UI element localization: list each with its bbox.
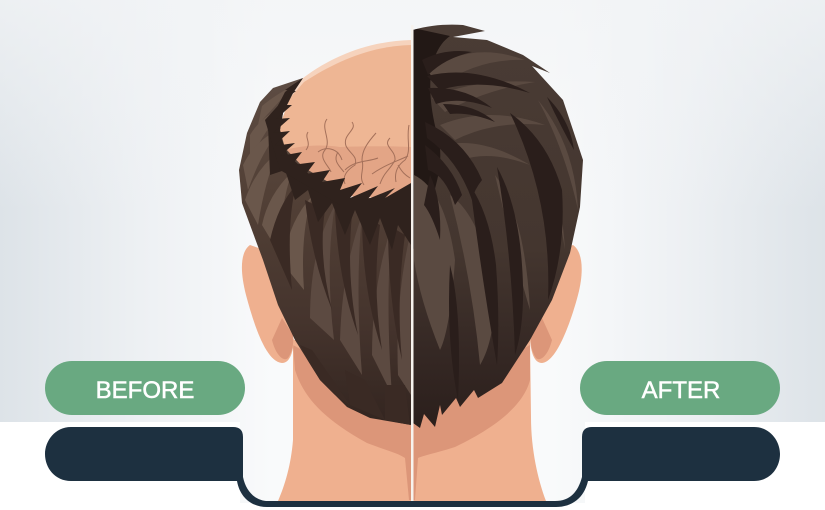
light strands upper left [243, 84, 312, 290]
right side: full hair [413, 20, 588, 435]
dark strands [270, 185, 410, 425]
after label [580, 361, 780, 415]
dark strands [422, 51, 574, 400]
left ear [242, 245, 294, 363]
mid strands [310, 205, 411, 395]
centre divider [411, 25, 414, 502]
right ear [530, 245, 582, 363]
hairline spikes [265, 78, 411, 205]
dark mass at parting [413, 28, 450, 250]
neck and ears [242, 245, 582, 501]
left side: balding scalp [276, 40, 411, 200]
bottom connector: dark bars [45, 427, 780, 507]
lighter strands [414, 52, 578, 365]
before label [45, 361, 245, 415]
after label: AFTER [642, 377, 720, 404]
thin hairs on scalp [306, 119, 410, 185]
before label: BEFORE [96, 377, 194, 404]
left side: hair [230, 70, 411, 430]
dark band under hairline [268, 78, 411, 250]
